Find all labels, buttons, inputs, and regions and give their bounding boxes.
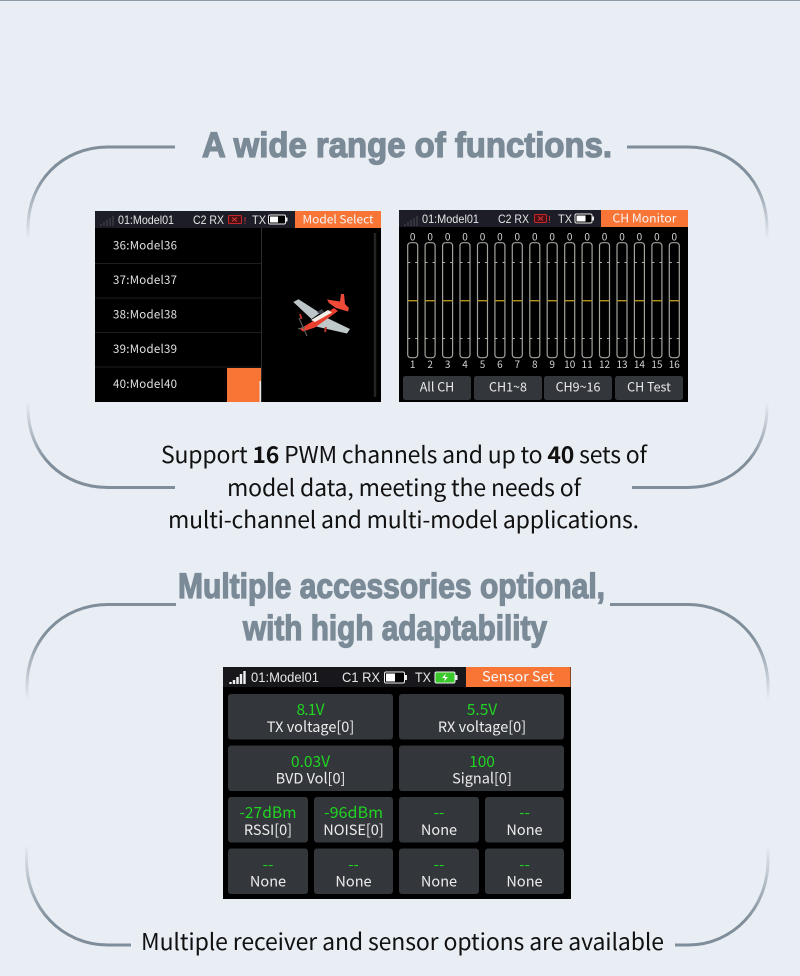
channel values: 0 xyxy=(567,228,573,244)
signal icon dim xyxy=(101,216,113,226)
channel values: 0 xyxy=(584,228,590,244)
card: RX voltage: 5.5V xyxy=(467,698,497,720)
channel numbers: 13 xyxy=(616,356,628,371)
channel values: 0 xyxy=(410,228,416,244)
text block: functions description: model data, meeting the needs of xyxy=(227,469,583,503)
tab: Sensor Set xyxy=(466,666,570,687)
card: BVD Vol: BVD Vol[0] xyxy=(276,768,345,788)
model list: 39:Model39 xyxy=(113,341,177,357)
channel values: 0 xyxy=(654,228,660,244)
channel values: 0 xyxy=(497,228,503,244)
buttons xyxy=(403,376,683,400)
channel numbers: 14 xyxy=(634,356,645,371)
channel values: 0 xyxy=(462,228,468,244)
selected orange block xyxy=(227,368,261,402)
text block: accessories description: Multiple receiver and sensor options are available xyxy=(141,923,664,957)
card: BVD Vol xyxy=(228,746,393,791)
RX battery xyxy=(384,672,407,683)
card: Signal: Signal[0] xyxy=(452,768,512,788)
channel numbers: 6 xyxy=(497,356,503,371)
channel values: 0 xyxy=(672,228,678,244)
channel numbers: 10 xyxy=(564,356,576,371)
icon: airplane xyxy=(293,294,350,336)
screen: CH Monitor: C2 RX xyxy=(498,212,529,226)
text block: functions description xyxy=(161,436,649,535)
channel values xyxy=(410,228,678,244)
channel numbers: 5 xyxy=(480,356,486,371)
TX battery charging xyxy=(435,672,458,683)
model list: 36:Model36 xyxy=(113,238,177,254)
card: RSSI: -27dBm xyxy=(240,801,296,823)
screen: Model Select: TX xyxy=(252,213,266,227)
channel values: 0 xyxy=(532,228,538,244)
channel numbers: 15 xyxy=(651,356,663,371)
screen: Sensor Set: C1 RX xyxy=(342,669,381,685)
channel values: 0 xyxy=(637,228,643,244)
card: None 3 xyxy=(228,848,308,894)
card: None 6: -- xyxy=(519,853,530,875)
heading: accessories: Multiple accessories optional, xyxy=(178,567,605,606)
card: Signal: 100 xyxy=(469,750,495,772)
RX battery warning: ! xyxy=(548,215,551,226)
channel values: 0 xyxy=(427,228,433,244)
buttons: CH1~8 xyxy=(489,376,527,396)
tab: Sensor Set: Sensor Set xyxy=(482,666,555,686)
buttons: CH9~16 xyxy=(556,376,600,396)
card: None 4: -- xyxy=(348,853,359,875)
channel values: 0 xyxy=(480,228,486,244)
card: None 4 xyxy=(314,848,393,894)
model list: 38:Model38 xyxy=(113,306,177,322)
channel values: 0 xyxy=(619,228,625,244)
text block: functions description: multi-channel and multi-model applications. xyxy=(168,501,639,535)
heading: accessories: with high adaptability xyxy=(242,609,547,648)
panel: accessories frame xyxy=(26,604,768,945)
channel values: 0 xyxy=(602,228,608,244)
channel values: 0 xyxy=(515,228,521,244)
card: RX voltage: RX voltage[0] xyxy=(438,716,526,737)
card: RSSI xyxy=(228,797,308,842)
card: None 5: None xyxy=(421,870,457,892)
card: None 6 xyxy=(485,848,564,894)
card: None 3: None xyxy=(250,870,286,892)
heading: accessories xyxy=(178,567,605,648)
screen: Sensor Set: TX xyxy=(415,669,432,685)
buttons: CH Test xyxy=(627,376,671,396)
card: None 3: -- xyxy=(263,853,273,875)
channel numbers: 11 xyxy=(582,356,593,371)
card: NOISE: NOISE[0] xyxy=(323,819,384,840)
signal icon dim xyxy=(405,216,417,226)
card: TX voltage: TX voltage[0] xyxy=(267,716,354,737)
channel values: 0 xyxy=(549,228,555,244)
buttons: All CH xyxy=(420,376,454,396)
channel numbers: 9 xyxy=(549,356,555,371)
channel numbers: 3 xyxy=(445,356,450,371)
screen: Model Select xyxy=(95,211,381,402)
card: None 1: -- xyxy=(434,801,444,823)
panel: functions frame xyxy=(28,147,767,488)
card: TX voltage xyxy=(228,694,393,740)
channel numbers: 2 xyxy=(427,356,433,371)
TX battery xyxy=(268,215,288,224)
channel numbers: 4 xyxy=(462,356,468,371)
channel numbers: 8 xyxy=(532,356,538,371)
model list: 40:Model40 xyxy=(113,376,177,392)
channel numbers: 16 xyxy=(669,356,680,371)
status text: 01:Model01 xyxy=(118,213,174,227)
channel numbers: 1 xyxy=(410,356,415,371)
heading: functions: A wide range of functions. xyxy=(202,126,612,165)
card: None 2: None xyxy=(506,819,543,840)
screen: Model Select: C2 RX xyxy=(193,213,224,227)
card: None 2 xyxy=(485,797,564,842)
signal icon xyxy=(230,671,244,684)
TX battery xyxy=(575,214,594,223)
channel values: 0 xyxy=(445,228,451,244)
card: RSSI: RSSI[0] xyxy=(244,819,292,840)
status text: 01:Model01 xyxy=(422,212,479,226)
card: None 1: None xyxy=(421,819,457,840)
card: None 2: -- xyxy=(519,801,530,823)
card: None 6: None xyxy=(506,870,543,892)
card: Signal xyxy=(399,746,564,791)
card: None 5 xyxy=(399,848,479,894)
status text: 01:Model01 xyxy=(251,669,319,685)
channel numbers: 7 xyxy=(515,356,521,371)
channel numbers xyxy=(410,356,680,371)
card: RX voltage xyxy=(399,694,564,740)
card: NOISE xyxy=(314,797,393,842)
screen: CH Monitor: TX xyxy=(558,212,572,226)
RX battery warning: ! xyxy=(244,216,246,227)
card: TX voltage: 8.1V xyxy=(296,698,325,720)
RX battery warning xyxy=(534,214,551,226)
model list xyxy=(113,238,177,392)
screen: CH Monitor xyxy=(399,210,688,402)
card: BVD Vol: 0.03V xyxy=(291,750,330,772)
RX battery warning xyxy=(228,216,246,227)
channel numbers: 12 xyxy=(599,356,610,371)
tab: CH Monitor: CH Monitor xyxy=(612,210,677,226)
model list: 37:Model37 xyxy=(113,272,177,288)
card: None 5: -- xyxy=(434,853,444,875)
text block: functions description: Support 16 PWM channels and up to 40 sets of xyxy=(161,436,649,470)
channel bars xyxy=(408,243,679,358)
card: NOISE: -96dBm xyxy=(324,801,383,823)
tab: Model Select: Model Select xyxy=(302,212,374,228)
card: None 4: None xyxy=(335,870,372,892)
card: None 1 xyxy=(399,797,479,842)
screen: Sensor Set xyxy=(223,666,571,899)
